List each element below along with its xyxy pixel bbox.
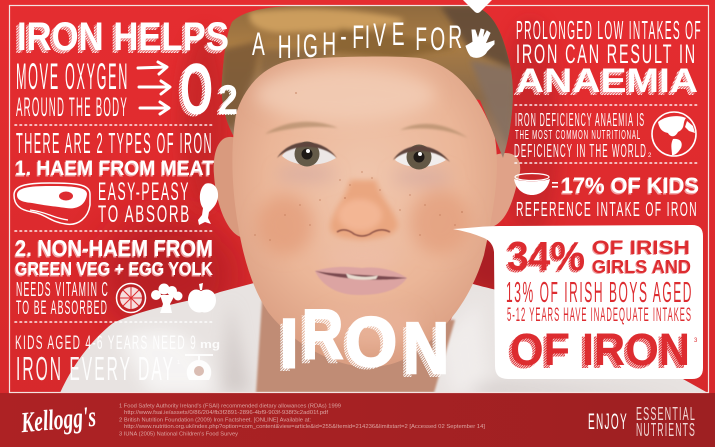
panel: left column: NEEDS VITAMIN C bbox=[16, 279, 109, 301]
text: non-haem: 2. NON-HAEM FROM bbox=[14, 236, 212, 262]
panel: left column: AROUND THE BODY bbox=[16, 92, 128, 122]
text: of irish girls and: OF IRISH bbox=[591, 239, 689, 260]
footnotes: 1 Food Safety Authority Ireland's (FSAI) recommended dietary allowances (RDAs) 1999 bbox=[119, 404, 341, 410]
O2 symbol: O bbox=[180, 50, 213, 130]
heading: of iron: OF IRON bbox=[507, 327, 687, 378]
heading: anaemia: ANAEMIA bbox=[514, 64, 696, 102]
text: prolonged low intakes bbox=[516, 15, 702, 69]
text: iron every day bbox=[16, 350, 181, 387]
text: kids aged 4-6 bbox=[15, 333, 220, 354]
nose bbox=[330, 180, 398, 240]
O2 symbol: O bbox=[177, 52, 210, 132]
panel: left column: TO BE ABSORBED bbox=[16, 298, 108, 319]
face bbox=[232, 57, 497, 367]
text: haem from meat: 1. HAEM FROM MEAT bbox=[14, 158, 213, 182]
panel: anaemia bbox=[513, 15, 702, 221]
shirt bbox=[60, 282, 708, 393]
icon: broccoli bbox=[151, 284, 182, 313]
stat: 34%: 34% bbox=[505, 235, 583, 281]
face shading bbox=[255, 69, 470, 345]
text: most common deficiency: 2 bbox=[648, 153, 652, 159]
icon: meat steak bbox=[14, 183, 90, 224]
text: kids aged 4-6: KIDS AGED 4-6 YEARS NEED 9 bbox=[15, 333, 197, 354]
big iron title on chin: N bbox=[403, 309, 449, 389]
text: move oxygen bbox=[16, 56, 129, 122]
logo: Kellogg's: Kellogg's bbox=[19, 401, 97, 439]
ears bbox=[214, 136, 240, 237]
icon: hand bbox=[466, 29, 494, 57]
O2 symbol: 2 bbox=[218, 76, 238, 123]
footnotes: http://www.nutrition.org.uk/index.php?option=com_content&view=article&id=255&Itemid=214236&limitstart=2 [Accessed 02 September 14] bbox=[124, 424, 486, 430]
heading: anaemia: ANAEMIA bbox=[513, 65, 695, 103]
text: vitamin c bbox=[16, 279, 109, 319]
footer band bbox=[0, 393, 715, 447]
top notch bbox=[463, 0, 492, 13]
tagline: enjoy essential nutrients: ENJOY bbox=[588, 409, 628, 434]
arrows bbox=[138, 62, 170, 114]
big iron title on chin: O bbox=[341, 306, 393, 384]
text: non-haem: 2. NON-HAEM FROM bbox=[15, 235, 213, 261]
O2 symbol: 2 bbox=[216, 77, 236, 124]
big iron title on chin: R bbox=[302, 295, 343, 373]
big iron title on chin: N bbox=[399, 313, 445, 393]
panel: left column: EASY-PEASY bbox=[98, 178, 190, 206]
icon: bowl bbox=[514, 174, 550, 195]
background shading bbox=[100, 20, 560, 335]
text: non-haem: GREEN VEG + EGG YOLK bbox=[14, 260, 212, 280]
big iron title on chin: I bbox=[280, 305, 298, 382]
photo of boy bbox=[60, 6, 708, 393]
heading: of iron: OF IRON bbox=[510, 324, 690, 375]
panel: left column bbox=[14, 15, 238, 387]
text: haem from meat: 1. HAEM FROM MEAT bbox=[15, 157, 214, 180]
big iron title on chin: I bbox=[276, 309, 294, 386]
text: most common deficiency bbox=[514, 110, 652, 161]
big iron title on chin bbox=[276, 295, 449, 393]
text: easy-peasy bbox=[98, 178, 191, 228]
eye: left bbox=[277, 142, 337, 166]
icon: globe bbox=[652, 112, 696, 156]
footnotes bbox=[119, 404, 486, 438]
panel: left column: IRON EVERY DAY bbox=[16, 350, 175, 387]
heading: anaemia: ANAEMIA bbox=[516, 62, 698, 100]
footnotes: 2 British Nutrition Foundation (2009) Iron Factsheet. [ONLINE] Available at: bbox=[119, 418, 311, 424]
big iron title on chin: R bbox=[298, 300, 339, 378]
eye: right bbox=[393, 144, 450, 170]
neck bbox=[256, 300, 455, 393]
heading: of iron: 3 bbox=[694, 338, 698, 344]
shirt folds bbox=[126, 318, 574, 392]
panel: footer bbox=[19, 401, 696, 440]
text: 17% of kids: 17% OF KIDS bbox=[560, 174, 698, 200]
high-five heading: A HIGH-FIVE FOR bbox=[252, 16, 462, 65]
icon: weighing scales bbox=[185, 354, 213, 380]
heading: iron helps: IRON HELPS bbox=[17, 15, 229, 59]
icon: orange slice bbox=[116, 284, 146, 312]
text: iron every day: 1 bbox=[177, 360, 181, 366]
tagline: enjoy essential nutrients bbox=[588, 404, 696, 440]
eyebrows bbox=[265, 122, 468, 138]
freckles bbox=[254, 92, 463, 241]
heading: iron helps: IRON HELPS bbox=[14, 18, 226, 62]
heading: iron helps: IRON HELPS bbox=[16, 16, 228, 60]
text: easy-peasy: TO ABSORB bbox=[98, 201, 191, 228]
icon: chicken leg bbox=[198, 183, 218, 225]
text: non-haem: GREEN VEG + EGG YOLK bbox=[15, 259, 213, 279]
text: of irish girls and bbox=[591, 238, 691, 278]
footnotes: http://www.fsai.ie/assets/0/86/204/fb3f2891-2896-4bf9-903f-938f3c2ad01f.pdf bbox=[124, 410, 329, 416]
text: of irish girls and: GIRLS AND bbox=[592, 257, 691, 277]
hair bbox=[222, 6, 513, 158]
big iron title on chin: O bbox=[345, 303, 397, 381]
text: kids aged 4-6: mg bbox=[200, 339, 220, 351]
footnotes: 3 IUNA (2005) National Children's Food Survey bbox=[119, 432, 239, 438]
speech bubble callout bbox=[453, 225, 703, 379]
text: of irish girls and: GIRLS AND bbox=[591, 258, 690, 278]
text: of irish girls and: OF IRISH bbox=[592, 238, 690, 259]
panel: left column: MOVE OXYGEN bbox=[16, 56, 129, 97]
text: 17% of kids: 17% OF KIDS bbox=[561, 173, 699, 198]
stat: 34%: 34% bbox=[507, 233, 585, 279]
infographic canvas: THERE ARE 2 TYPES OF IRON bbox=[16, 128, 213, 160]
hair highlights bbox=[222, 6, 515, 150]
mouth bbox=[315, 267, 407, 295]
text: non-haem bbox=[14, 235, 213, 280]
icon: apple bbox=[188, 283, 216, 312]
